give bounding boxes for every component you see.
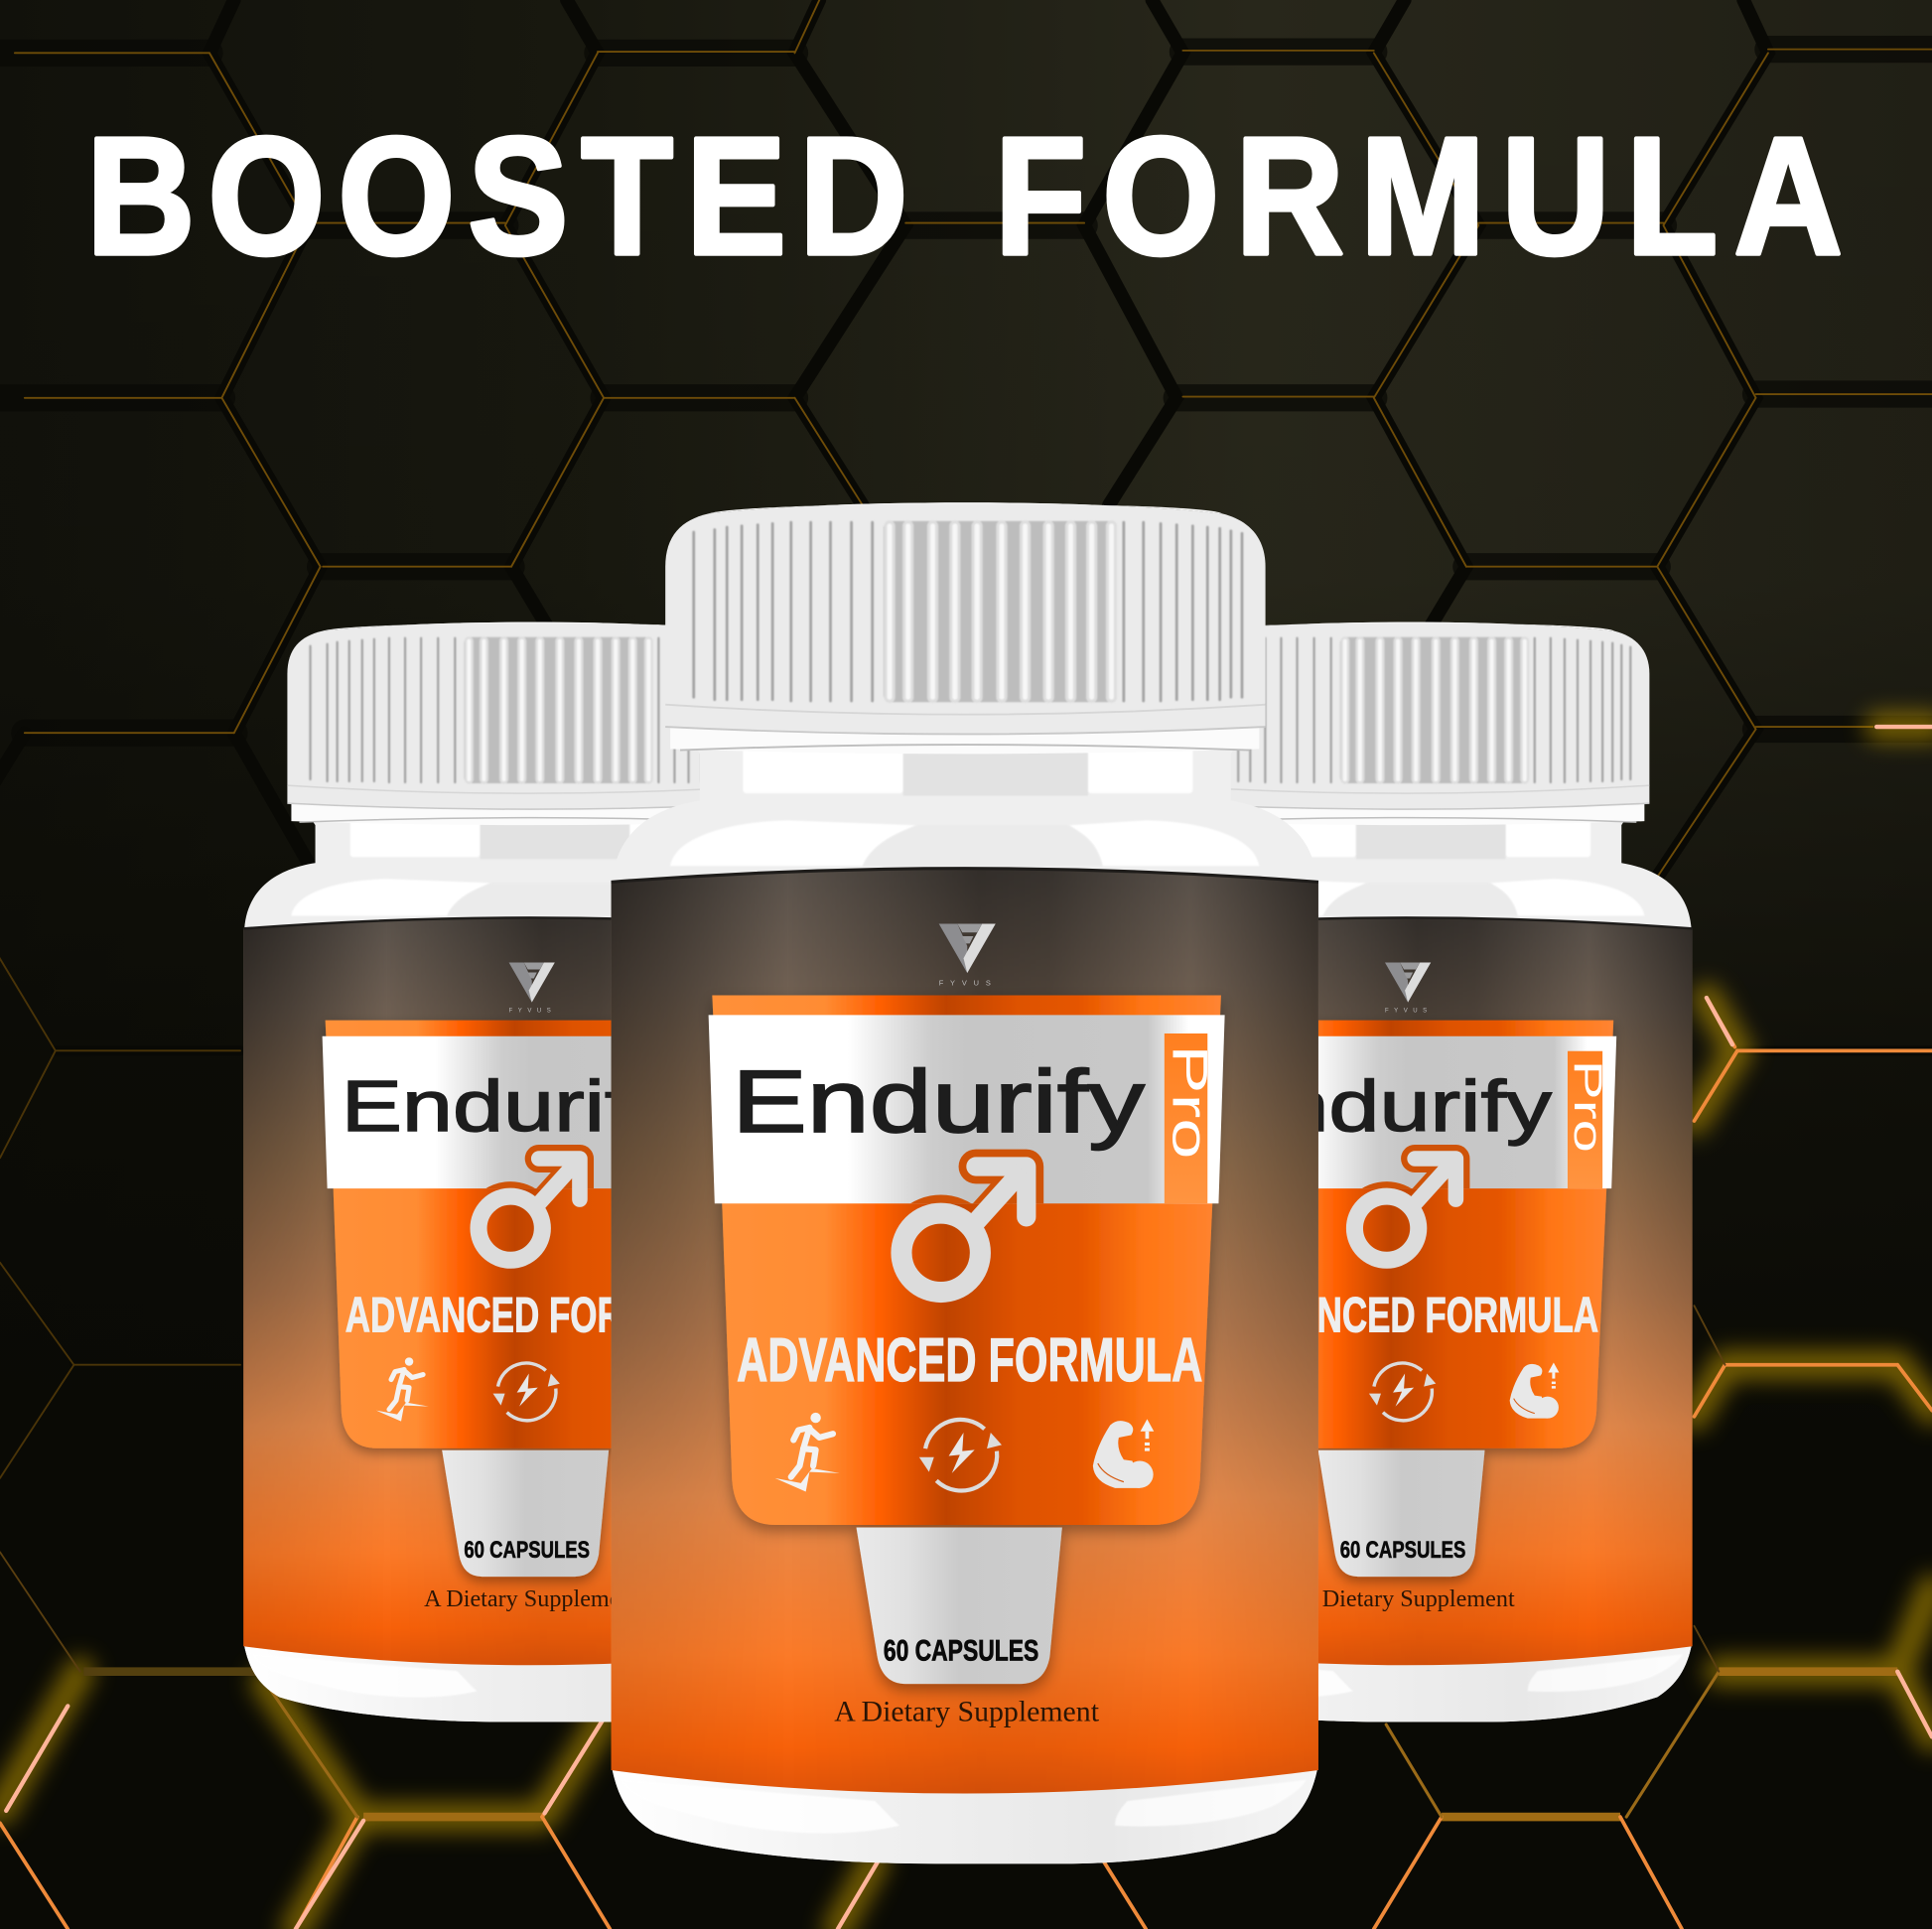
product suffix: Pro xyxy=(1162,1044,1218,1160)
bottle: right: 60 CAPSULES xyxy=(1340,1537,1465,1564)
bottle: right: Pro xyxy=(1566,1060,1610,1153)
brand name: FYVUS xyxy=(939,979,998,988)
title xyxy=(86,103,1843,290)
icon: runner xyxy=(775,1413,840,1492)
bottle: right xyxy=(1120,622,1693,1722)
bottle: left: ADVANCED FORMULA xyxy=(345,1288,723,1342)
bottle: left: FYVUS xyxy=(509,1009,556,1015)
capsule count: 60 CAPSULES xyxy=(884,1635,1038,1668)
bottle: left xyxy=(243,622,816,1722)
bottle: right: ADVANCED FORMULA xyxy=(1221,1288,1598,1342)
bottle: right: A Dietary Supplement xyxy=(1301,1586,1515,1612)
bottle: right: Endurify xyxy=(1217,1067,1552,1147)
bottle body xyxy=(613,720,1317,1863)
bottle: left: Endurify xyxy=(342,1067,675,1147)
icon: flexed muscle xyxy=(1093,1419,1154,1488)
title: BOOSTED xyxy=(86,103,908,290)
label heading: ADVANCED FORMULA xyxy=(737,1326,1202,1395)
bottle: left: A Dietary Supplement xyxy=(424,1586,639,1612)
icon: brand logo xyxy=(939,924,996,973)
supplement note: A Dietary Supplement xyxy=(834,1695,1100,1727)
title: FORMULA xyxy=(995,103,1843,290)
bottle cap xyxy=(665,502,1266,734)
product name: Endurify xyxy=(732,1051,1145,1151)
bottle: right: FYVUS xyxy=(1385,1009,1433,1015)
icon: male symbol xyxy=(898,1167,1027,1295)
background: glowing orange hex edges xyxy=(0,727,1932,1929)
bottle: left: Pro xyxy=(690,1060,735,1153)
bottle label xyxy=(612,850,1318,1823)
bottle: left: 60 CAPSULES xyxy=(464,1537,590,1564)
icon: energy cycle xyxy=(919,1420,1002,1491)
bottle: center xyxy=(612,502,1318,1863)
